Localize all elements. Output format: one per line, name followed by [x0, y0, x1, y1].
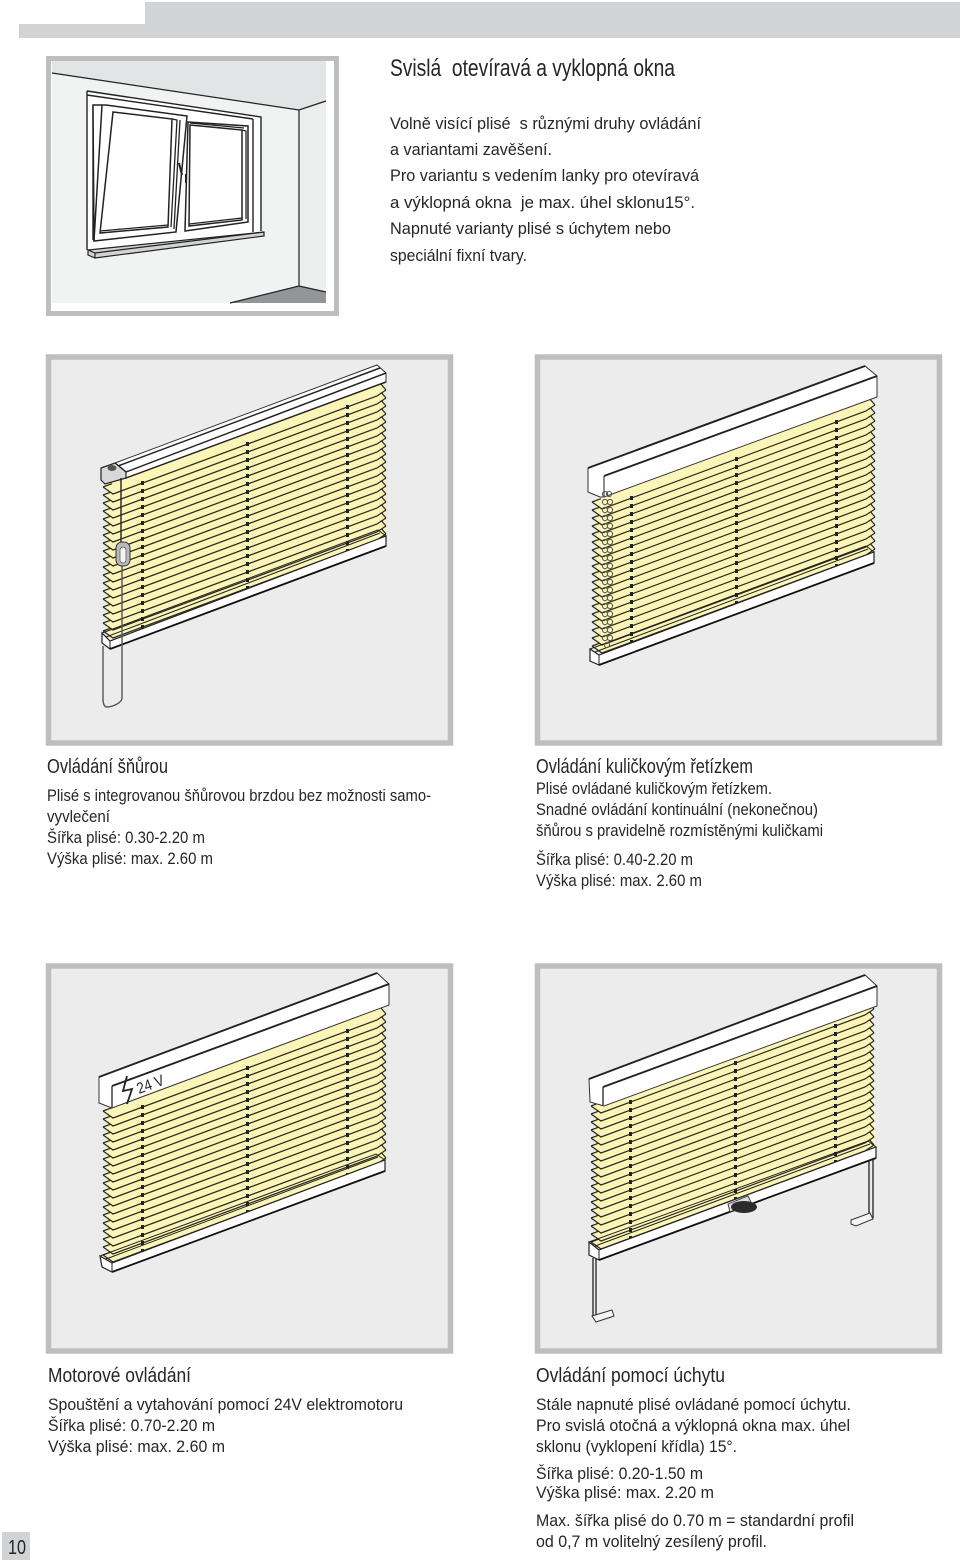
text block: window description — [390, 114, 701, 265]
text block: cord control: Ovládání šňůrou — [47, 755, 168, 778]
text block: bead chain control: Snadné ovládání kontinuální (nekonečnou) — [536, 800, 818, 819]
text block: handle control: Pro svislá otočná a výklopná okna max. úhel — [536, 1416, 850, 1435]
panel: handle blind — [538, 966, 940, 1351]
heading: window type: Svislá otevíravá a vyklopná okna — [390, 55, 676, 82]
text block: motor control: Spouštění a vytahování pomocí 24V elektromotoru — [48, 1395, 403, 1414]
text block: window description: Volně visící plisé s různými druhy ovládání — [390, 114, 701, 133]
text block: window description: Napnuté varianty plisé s úchytem nebo — [390, 219, 671, 238]
text block: bead chain control: šňůrou s pravidelně rozmístěnými kuličkami — [536, 821, 823, 840]
text block: handle control: Výška plisé: max. 2.20 m — [536, 1483, 714, 1502]
page number: 10 — [8, 1537, 26, 1559]
text block: handle control: Stále napnuté plisé ovládané pomocí úchytu. — [536, 1395, 851, 1414]
text block: cord control: vyvlečení — [47, 807, 110, 826]
left guide leg with foot — [592, 1258, 614, 1322]
text block: cord control — [47, 755, 431, 868]
text block: window description: Pro variantu s vedením lanky pro otevíravá — [390, 166, 700, 185]
icon: lightning bolt — [123, 1076, 132, 1104]
text block: window description: speciální fixní tvary. — [390, 246, 527, 265]
label: 24 V: 24 V — [135, 1072, 167, 1098]
text block: handle control — [536, 1364, 854, 1551]
right guide leg with foot — [851, 1160, 873, 1226]
panel: cord operated blind — [48, 357, 450, 743]
text block: bead chain control: Ovládání kuličkovým řetízkem — [536, 755, 753, 778]
text block: handle control: Šířka plisé: 0.20-1.50 m — [536, 1464, 703, 1483]
text block: bead chain control: Výška plisé: max. 2.60 m — [536, 871, 702, 890]
panel: bead chain blind — [538, 357, 940, 743]
text block: window description: a výklopná okna je max. úhel sklonu15°. — [390, 193, 695, 212]
text block: motor control — [48, 1364, 403, 1456]
panel: window illustration — [48, 58, 336, 314]
text block: bead chain control: Plisé ovládané kuličkovým řetízkem. — [536, 779, 772, 798]
text block: cord control: Plisé s integrovanou šňůrovou brzdou bez možnosti samo- — [47, 786, 431, 805]
page number — [2, 1532, 30, 1560]
text block: bead chain control: Šířka plisé: 0.40-2.20 m — [536, 850, 693, 869]
header bar — [19, 2, 960, 38]
text block: handle control: od 0,7 m volitelný zesílený profil. — [536, 1532, 767, 1551]
text block: motor control: Šířka plisé: 0.70-2.20 m — [48, 1416, 215, 1435]
text block: cord control: Výška plisé: max. 2.60 m — [47, 849, 213, 868]
text block: bead chain control — [536, 755, 823, 890]
text block: cord control: Šířka plisé: 0.30-2.20 m — [47, 828, 205, 847]
text block: motor control: Motorové ovládání — [48, 1364, 191, 1387]
text block: window description: a variantami zavěšení. — [390, 140, 552, 159]
panel: motor blind — [48, 966, 450, 1351]
handle — [728, 1196, 757, 1213]
text block: motor control: Výška plisé: max. 2.60 m — [48, 1437, 225, 1456]
text block: handle control: Ovládání pomocí úchytu — [536, 1364, 725, 1387]
text block: handle control: sklonu (vyklopení křídla) 15°. — [536, 1437, 737, 1456]
text block: handle control: Max. šířka plisé do 0.70 m = standardní profil — [536, 1511, 854, 1530]
